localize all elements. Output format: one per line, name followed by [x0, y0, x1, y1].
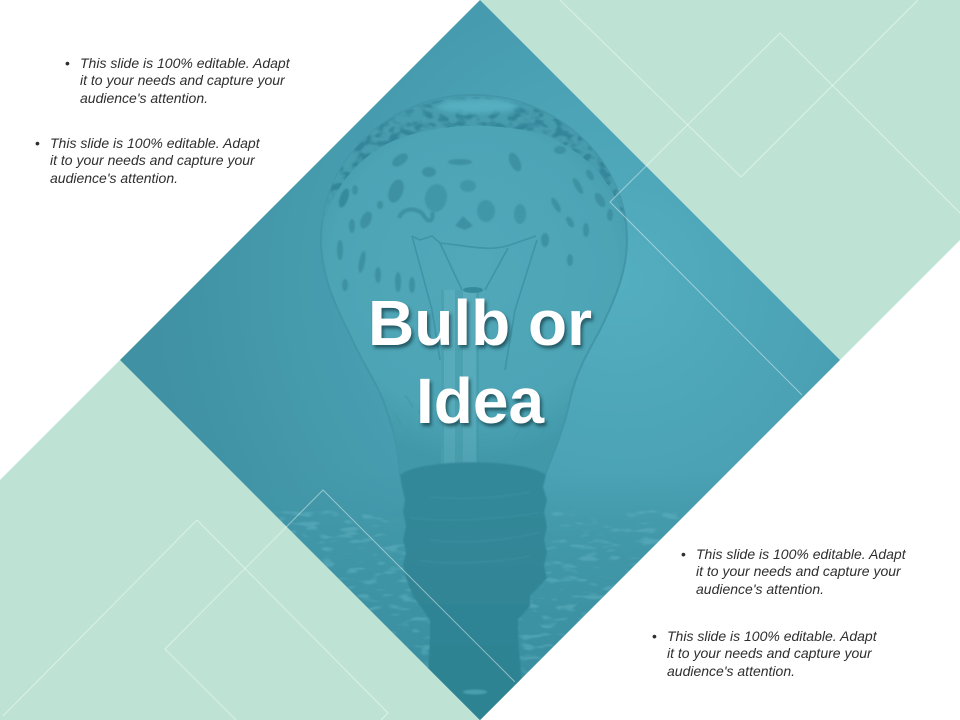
- text block: top note 1: it to your needs and capture your: [80, 72, 285, 88]
- title: [368, 287, 595, 437]
- central diamond photo of bulb: [120, 0, 840, 720]
- text block: bottom note 1: •: [681, 546, 686, 562]
- water droplets: [337, 146, 613, 293]
- text block: top note 2: audience's attention.: [50, 170, 178, 186]
- text block: bottom note 2: it to your needs and capture your: [667, 645, 872, 661]
- text block: top note 2: •: [35, 135, 40, 151]
- green panel: bottom left: [0, 360, 480, 720]
- text block: bottom note 1: audience's attention.: [696, 581, 824, 597]
- outline: bottom left lines: [3, 490, 515, 720]
- text block: bottom note 1: it to your needs and capture your: [696, 563, 901, 579]
- title: Bulb or: [368, 287, 592, 359]
- bulb glass: [320, 95, 630, 475]
- text block: bottom note 1: This slide is 100% editable. Adapt: [696, 546, 906, 562]
- text block: bottom note 2: audience's attention.: [667, 663, 795, 679]
- water surface: [250, 486, 714, 720]
- glass stem: [441, 290, 477, 465]
- text block: top note 2: it to your needs and capture your: [50, 152, 255, 168]
- green panel: top right: [480, 0, 960, 360]
- text block: bottom note 1: [681, 546, 906, 597]
- text block: bottom note 2: This slide is 100% editable. Adapt: [667, 628, 877, 644]
- outline: top right lines: [560, 0, 960, 395]
- text block: top note 1: This slide is 100% editable. Adapt: [80, 55, 290, 71]
- textured rim at top of glass: [320, 95, 630, 225]
- filament wires: [412, 236, 537, 370]
- reflection of the bulb: [428, 646, 522, 720]
- dimples on lower glass: [404, 395, 409, 402]
- screw base: [400, 462, 547, 650]
- text block: top note 2: [35, 135, 260, 186]
- text block: bottom note 2: •: [652, 628, 657, 644]
- text block: bottom note 2: [652, 628, 878, 679]
- text block: top note 1: audience's attention.: [80, 90, 208, 106]
- thread highlights: [410, 492, 540, 563]
- title: Idea: [416, 365, 544, 437]
- text block: top note 1: •: [65, 55, 70, 71]
- text block: top note 2: This slide is 100% editable. Adapt: [50, 135, 260, 151]
- text block: top note 1: [65, 55, 290, 106]
